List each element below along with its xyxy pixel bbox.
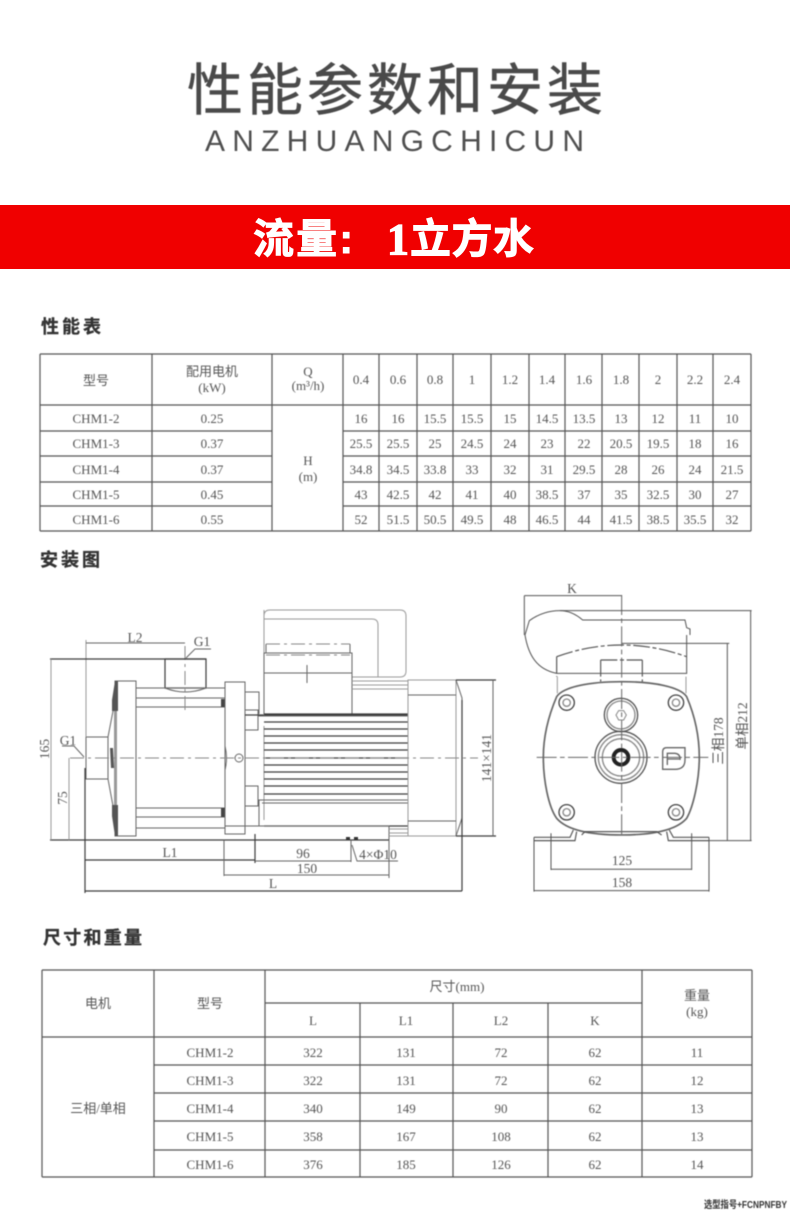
- row CHM1-3: 23: [540, 436, 554, 451]
- row CHM1-4: 33.8: [424, 462, 446, 477]
- table header: L: [309, 1013, 317, 1028]
- row CHM1-4: 32: [504, 462, 516, 477]
- row CHM1-5: 38.5: [536, 487, 558, 502]
- carry handle and terminal box: [264, 610, 408, 714]
- table header row: 1: [469, 372, 475, 387]
- front view labels: 单相212: [735, 702, 750, 750]
- table header row: 0.6: [390, 372, 407, 387]
- row CHM1-5: 32.5: [647, 487, 669, 502]
- row CHM1-6: CHM1-6: [73, 512, 120, 527]
- row CHM1-2: CHM1-2: [73, 411, 119, 426]
- row CHM1-3: 16: [726, 436, 739, 451]
- row CHM1-5: 37: [578, 487, 591, 502]
- row CHM1-2: [187, 1045, 703, 1060]
- row CHM1-3: 25: [428, 436, 442, 451]
- table header row: 配用电机: [186, 364, 238, 379]
- row CHM1-5: CHM1-5: [73, 487, 119, 502]
- row CHM1-5: 42: [428, 487, 442, 502]
- row CHM1-4: [187, 1101, 704, 1116]
- row CHM1-5: [73, 487, 739, 502]
- dimension labels: [37, 630, 494, 891]
- motor type label: 三相/单相: [70, 1101, 126, 1116]
- row CHM1-4: 31: [540, 462, 554, 477]
- row CHM1-2: 72: [494, 1045, 508, 1060]
- row CHM1-4: 13: [690, 1101, 704, 1116]
- row CHM1-3: 322: [303, 1073, 323, 1088]
- table header row: (m³/h): [292, 378, 324, 393]
- row CHM1-5: 13: [690, 1129, 704, 1144]
- head unit label: [299, 453, 317, 484]
- row CHM1-6: 126: [491, 1157, 511, 1172]
- dimension labels: G1: [194, 634, 210, 649]
- table header row: 0.8: [427, 372, 443, 387]
- ports: [595, 698, 647, 783]
- row CHM1-2: 13.5: [573, 411, 595, 426]
- row CHM1-6: 14: [690, 1157, 704, 1172]
- front view labels: 158: [612, 875, 632, 890]
- table header row: [83, 364, 741, 395]
- row CHM1-2: 131: [396, 1045, 416, 1060]
- row CHM1-2: 322: [303, 1045, 323, 1060]
- table header row: 2.4: [724, 372, 741, 387]
- row CHM1-2: 62: [588, 1045, 602, 1060]
- dimension labels: L1: [162, 845, 178, 860]
- table header: 尺寸(mm): [430, 979, 484, 994]
- row CHM1-2: 16: [354, 411, 368, 426]
- row CHM1-6: 41.5: [610, 512, 632, 527]
- table header: L1: [399, 1013, 413, 1028]
- row CHM1-3: [73, 436, 739, 451]
- row CHM1-5: 42.5: [387, 487, 409, 502]
- dimensions table: [42, 970, 752, 1177]
- table header: [85, 979, 710, 1028]
- table header: 重量: [684, 988, 710, 1003]
- banner: flow rate: [0, 205, 790, 269]
- performance table: [40, 354, 751, 531]
- row CHM1-2: [73, 411, 738, 426]
- logo: [663, 748, 685, 769]
- heading: installation drawing: 安装图: [40, 550, 100, 570]
- row CHM1-2: 11: [691, 1045, 703, 1060]
- centerlines: [537, 595, 708, 837]
- row CHM1-5: 108: [491, 1129, 511, 1144]
- dimension labels: 96: [296, 846, 310, 861]
- front view labels: 125: [612, 853, 632, 868]
- row CHM1-6: 52: [354, 512, 368, 527]
- subtitle: ANZHUANGCHICUN: [205, 125, 584, 158]
- dimension labels: 150: [297, 861, 317, 876]
- row CHM1-4: 33: [466, 462, 478, 477]
- row CHM1-4: 28: [614, 462, 628, 477]
- row CHM1-6: [73, 512, 738, 527]
- head unit label: (m): [299, 469, 317, 484]
- row CHM1-3: 131: [396, 1073, 416, 1088]
- row CHM1-3: 20.5: [610, 436, 632, 451]
- row CHM1-6: 48: [504, 512, 516, 527]
- row CHM1-5: 358: [303, 1129, 323, 1144]
- row CHM1-6: 50.5: [424, 512, 446, 527]
- row CHM1-4: CHM1-4: [73, 462, 120, 477]
- row CHM1-4: CHM1-4: [187, 1101, 234, 1116]
- row CHM1-6: 35.5: [684, 512, 706, 527]
- table header: 电机: [85, 996, 111, 1011]
- front view labels: K: [567, 581, 577, 596]
- dimension labels: 75: [55, 791, 70, 805]
- handle and terminal cover: [525, 611, 690, 693]
- row CHM1-2: 0.25: [201, 411, 223, 426]
- center line: [70, 757, 478, 759]
- row CHM1-3: 19.5: [647, 436, 669, 451]
- row CHM1-3: CHM1-3: [187, 1073, 233, 1088]
- dimension labels: L: [269, 876, 277, 891]
- feet: [534, 830, 709, 841]
- row CHM1-5: 40: [504, 487, 516, 502]
- fan cover: [408, 680, 462, 836]
- row CHM1-4: 21.5: [721, 462, 743, 477]
- dimension labels: G1: [60, 733, 76, 748]
- row CHM1-6: 44: [578, 512, 591, 527]
- bolts: [559, 695, 684, 820]
- pump head: [86, 659, 259, 836]
- row CHM1-2: 13: [614, 411, 628, 426]
- row CHM1-2: 15.5: [461, 411, 483, 426]
- dimension lines: [50, 640, 496, 893]
- heading: performance table: 性能表: [41, 317, 101, 337]
- table header row: 1.6: [576, 372, 593, 387]
- table header: K: [590, 1013, 600, 1028]
- row CHM1-2: 14.5: [536, 411, 558, 426]
- table header: L2: [494, 1013, 508, 1028]
- row CHM1-3: 18: [688, 436, 702, 451]
- title: 性能参数和安装: [187, 59, 603, 122]
- table header row: 型号: [83, 373, 109, 388]
- dimension labels: L2: [128, 630, 142, 645]
- row CHM1-6: 46.5: [536, 512, 558, 527]
- row CHM1-4: 29.5: [573, 462, 595, 477]
- table header row: (kW): [198, 380, 226, 395]
- row CHM1-3: 0.37: [201, 436, 224, 451]
- table header row: 2.2: [687, 372, 703, 387]
- row CHM1-6: 38.5: [647, 512, 669, 527]
- pump end plate: [543, 682, 699, 835]
- heading: dimensions and weight: 尺寸和重量: [43, 928, 142, 948]
- row CHM1-6: [187, 1157, 704, 1172]
- side view drawing: [37, 610, 496, 893]
- row CHM1-2: 12: [652, 411, 664, 426]
- row CHM1-4: 90: [494, 1101, 508, 1116]
- row CHM1-3: CHM1-3: [73, 436, 119, 451]
- row CHM1-6: 32: [726, 512, 738, 527]
- row CHM1-5: CHM1-5: [187, 1129, 233, 1144]
- row CHM1-4: [73, 462, 743, 477]
- row CHM1-5: 27: [726, 487, 739, 502]
- dimensions: [524, 596, 752, 892]
- dimension labels: 4×Φ10: [359, 847, 397, 862]
- row CHM1-6: 51.5: [387, 512, 409, 527]
- table header row: 1.8: [613, 372, 629, 387]
- row CHM1-2: 11: [689, 411, 701, 426]
- row CHM1-3: 12: [690, 1073, 704, 1088]
- row CHM1-4: 62: [588, 1101, 602, 1116]
- row CHM1-5: 167: [396, 1129, 416, 1144]
- row CHM1-4: 0.37: [201, 462, 224, 477]
- row CHM1-4: 149: [396, 1101, 416, 1116]
- row CHM1-2: 16: [392, 411, 405, 426]
- row CHM1-5: 43: [354, 487, 368, 502]
- front view labels: 三相178: [711, 717, 726, 765]
- row CHM1-2: CHM1-2: [187, 1045, 233, 1060]
- banner: flow rate: 立方水: [410, 216, 534, 262]
- row CHM1-5: [187, 1129, 704, 1144]
- row CHM1-4: 26: [652, 462, 665, 477]
- row CHM1-5: 35: [614, 487, 628, 502]
- row CHM1-5: 30: [688, 487, 702, 502]
- table header row: 0.4: [353, 372, 370, 387]
- banner: flow rate: 流量:: [253, 216, 353, 262]
- row CHM1-5: 41: [466, 487, 478, 502]
- row CHM1-4: 34.8: [350, 462, 372, 477]
- motor body with fins: [225, 610, 408, 840]
- row CHM1-6: 62: [588, 1157, 602, 1172]
- row CHM1-3: 22: [578, 436, 590, 451]
- row CHM1-6: 0.55: [201, 512, 223, 527]
- row CHM1-5: 62: [588, 1129, 602, 1144]
- front view labels: [567, 581, 750, 890]
- table header: 型号: [197, 996, 223, 1011]
- row CHM1-6: 185: [396, 1157, 416, 1172]
- dimension labels: 165: [37, 739, 52, 759]
- row CHM1-2: 15: [504, 411, 516, 426]
- row CHM1-6: 376: [303, 1157, 323, 1172]
- row CHM1-2: 10: [726, 411, 738, 426]
- row CHM1-3: 24: [504, 436, 517, 451]
- row CHM1-6: CHM1-6: [187, 1157, 234, 1172]
- row CHM1-3: 25.5: [387, 436, 409, 451]
- row CHM1-6: 49.5: [461, 512, 483, 527]
- row CHM1-3: 25.5: [350, 436, 372, 451]
- head unit label: H: [303, 453, 313, 468]
- table header row: 1.4: [539, 372, 556, 387]
- banner: flow rate: 1: [387, 215, 409, 264]
- table header row: 2: [655, 372, 661, 387]
- table header: (kg): [686, 1004, 708, 1019]
- row CHM1-4: 34.5: [387, 462, 409, 477]
- row CHM1-2: 15.5: [424, 411, 446, 426]
- front outline, scaled from detail coordinates: [524, 595, 752, 892]
- front view drawing: [524, 581, 752, 892]
- row CHM1-3: 72: [494, 1073, 508, 1088]
- row CHM1-4: 24: [688, 462, 702, 477]
- row CHM1-4: 340: [303, 1101, 323, 1116]
- row CHM1-3: 62: [588, 1073, 602, 1088]
- table header row: 1.2: [502, 372, 518, 387]
- row CHM1-5: 0.45: [201, 487, 223, 502]
- dimension labels: 141×141: [479, 734, 494, 782]
- row CHM1-3: 24.5: [461, 436, 483, 451]
- table header row: Q: [303, 364, 313, 379]
- row CHM1-3: [187, 1073, 704, 1088]
